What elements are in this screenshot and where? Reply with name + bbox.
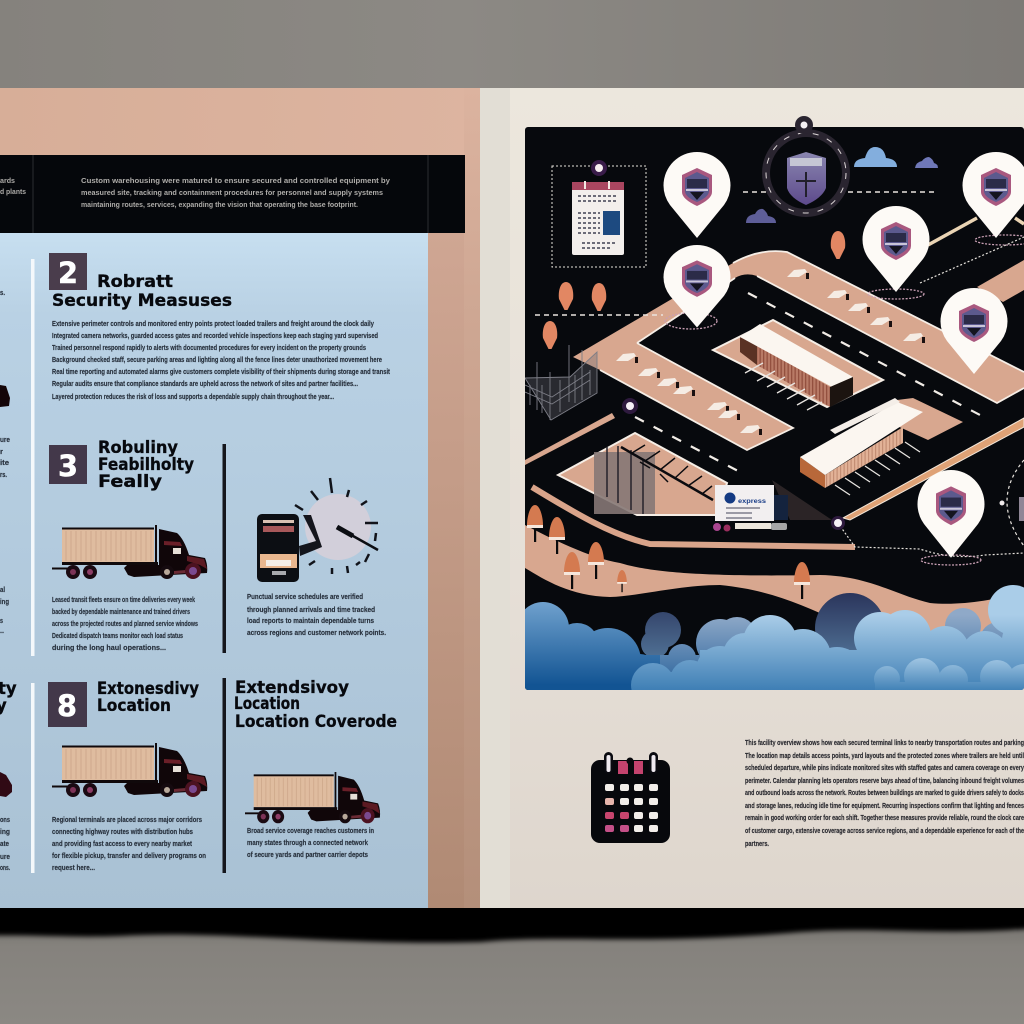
mid gray blue clouds	[660, 608, 1004, 672]
location pin 2	[664, 245, 730, 328]
heading: reliability: Robuliny	[98, 438, 178, 457]
icon: calendar	[591, 752, 670, 843]
panel: left page	[0, 88, 480, 908]
body text: truck and clock: through planned arrivals and time tracked	[247, 605, 375, 614]
blue content panel	[0, 233, 428, 908]
left edge cropped fragments: ate	[0, 839, 9, 848]
security fence	[525, 345, 597, 420]
body text: security measures: Background checked staff, secure parking areas and lighting along all the fence lines deter unauthorized movement here	[52, 355, 382, 364]
location pin 4	[962, 152, 1024, 238]
body text: security measures: Regular audits ensure that compliance standards are upheld across the network of sites and partner facilities...	[52, 379, 358, 388]
road centre dashes	[635, 293, 980, 472]
truck illustration	[52, 743, 207, 797]
delivery truck with sign: express	[738, 499, 767, 505]
heading: reliability: Feally	[98, 472, 162, 491]
heading: extensive location: Location	[97, 696, 171, 715]
body text: truck and clock: Punctual service schedules are verified	[247, 592, 363, 601]
location pin 6	[918, 470, 984, 558]
heading: security measures: Robratt	[97, 272, 173, 291]
body text: location coverage: many states through a connected network	[247, 838, 369, 847]
heading: location coverage: Location Coverode	[235, 712, 397, 731]
calendar panel	[552, 160, 646, 267]
left edge cropped fragments	[0, 288, 17, 872]
right road band	[977, 260, 1024, 302]
black intro band	[0, 155, 465, 233]
heading: security measures: Security Measuses	[52, 291, 232, 310]
page sheet	[510, 88, 1024, 908]
body text: security measures: Integrated camera networks, guarded access gates and recorded vehicle inspections keep each staging yard supervised	[52, 331, 378, 340]
body text: security measures: Extensive perimeter controls and monitored entry points protect loaded trailers and freight around the clock daily	[52, 319, 375, 328]
upper road band	[573, 251, 1024, 450]
diagonal roadside strip	[843, 418, 1024, 520]
body text: reliability: Leased transit fleets ensure on time deliveries every week	[52, 595, 196, 604]
building 2	[800, 398, 963, 488]
location pin 3	[862, 206, 930, 292]
body text: location coverage: Broad service coverage reaches customers in	[247, 826, 374, 835]
route nodes	[622, 398, 845, 530]
body text: security measures	[52, 319, 390, 401]
body text: reliability	[52, 595, 198, 652]
body text: extensive location: connecting highway routes with distribution hubs	[52, 827, 193, 836]
body text: reliability: Dedicated dispatch teams monitor each load status	[52, 631, 183, 640]
heading: extensive location: Extonesdivy	[97, 679, 199, 698]
body text: truck and clock: load reports to maintain dependable turns	[247, 616, 374, 625]
section 4: location coverage	[234, 678, 397, 859]
badge hanging loop above map	[795, 116, 813, 134]
book gutter	[480, 88, 510, 908]
section dividers	[31, 259, 226, 873]
left edge cropped fragments: r	[0, 447, 3, 456]
body text: security measures: Real time reporting and automated alarms give customers complete visibility of their shipments during storage and transit	[52, 367, 390, 376]
dotted route lines	[838, 237, 1024, 557]
location pin 5	[940, 288, 1008, 374]
left edge cropped fragments: al	[0, 585, 5, 594]
body text: truck and clock: across regions and customer network points.	[247, 628, 386, 637]
map base	[525, 127, 1024, 690]
fenced lot	[558, 433, 727, 515]
left edge cropped fragments: s	[0, 616, 3, 625]
body text: security measures: Layered protection reduces the risk of loss and supports a dependable supply chain throughout the year...	[52, 392, 334, 401]
number badge 8	[48, 682, 87, 727]
truck illustration	[52, 525, 207, 579]
number badge 2	[49, 253, 87, 290]
black intro band: Custom warehousing were matured to ensure secured and controlled equipment by	[81, 176, 391, 185]
number badge 3: 3	[58, 449, 78, 483]
left edge cropped fragments: ons	[0, 815, 10, 824]
small clouds	[746, 147, 938, 223]
section 8: extensive location	[48, 679, 207, 872]
front right cloud	[874, 658, 1024, 700]
heading: security measures	[52, 272, 232, 310]
tan connector to pin	[928, 218, 1024, 245]
body text: extensive location: for flexible pickup, transfer and delivery programs on	[52, 851, 206, 860]
body text: reliability: backed by dependable maintenance and trained drivers	[52, 607, 190, 616]
black intro band: ards	[0, 176, 15, 185]
number badge 8: 8	[57, 689, 77, 723]
central shield badge	[762, 129, 850, 217]
heading: location coverage: Extendsivoy	[235, 678, 349, 697]
left edge cropped fragments: ons.	[0, 863, 10, 872]
left edge cropped fragments: rs.	[0, 470, 7, 479]
truck illustration	[245, 772, 380, 823]
body text: reliability: across the projected routes and planned service windows	[52, 619, 198, 628]
body text: extensive location: Regional terminals are placed across major corridors	[52, 815, 202, 824]
left edge cropped fragments: ure	[0, 435, 10, 444]
body text: security measures: Trained personnel respond rapidly to alerts with documented procedures for every incident on the property grounds	[52, 343, 366, 352]
icon: truck front with clock gauge	[257, 478, 378, 582]
concrete floor background	[0, 905, 1024, 1024]
body text: extensive location: and providing fast access to every nearby market	[52, 839, 192, 848]
dashed route lines	[535, 192, 938, 315]
black intro band: d plants	[0, 187, 26, 196]
body text: extensive location: request here...	[52, 863, 95, 872]
front centre cloud	[631, 615, 865, 707]
short left strip	[525, 413, 615, 465]
left edge cropped fragments: ..	[0, 626, 4, 635]
number badge 2: 2	[58, 256, 78, 290]
left edge cropped fragments: ing	[0, 597, 9, 606]
heading: reliability: Feabilholty	[98, 455, 194, 474]
panel: right page	[480, 88, 1024, 908]
location pin 1	[664, 152, 730, 238]
body text: location coverage: of secure yards and partner carrier depots	[247, 850, 368, 859]
right dotted ring and gray panel	[1000, 460, 1024, 546]
left edge cropped fragments: s.	[0, 288, 5, 297]
location pin shadows	[665, 235, 1024, 565]
left cloud	[525, 602, 660, 690]
vehicles on strips	[616, 269, 925, 435]
body text: right page: partners.	[745, 839, 769, 848]
left edge cropped fragments: ing	[0, 827, 10, 836]
cloud bank	[525, 585, 1024, 690]
trees	[527, 231, 845, 599]
thin curved strip	[532, 487, 855, 547]
body text: location coverage	[247, 826, 374, 859]
body text: truck and clock	[247, 592, 386, 637]
left edge cropped fragments: ure	[0, 852, 10, 861]
heading: location coverage	[234, 678, 397, 731]
heading: reliability	[98, 438, 194, 491]
right cloud	[854, 585, 1024, 690]
building 1	[713, 320, 883, 407]
map illustration	[507, 127, 1024, 707]
concrete wall background	[0, 0, 1024, 90]
heading: extensive location	[97, 679, 199, 715]
parking stripes 1	[745, 363, 822, 410]
lower land strip	[525, 525, 992, 632]
delivery truck with sign	[713, 480, 832, 532]
section 2: security measures	[49, 253, 390, 401]
black intro band: measured site, tracking and containment procedures for personnel and supply systems	[81, 188, 383, 197]
left edge cropped fragments: ite	[0, 458, 9, 467]
body text: extensive location	[52, 815, 206, 872]
book drop shadow	[0, 900, 1024, 943]
number badge 3	[49, 445, 87, 484]
section 3: reliability	[49, 438, 386, 652]
back navy clouds	[641, 593, 882, 655]
tan outer strip	[464, 88, 480, 908]
black intro band: maintaining routes, services, expanding the vision that operating the base footprint.	[81, 200, 358, 209]
body text: reliability: during the long haul operations...	[52, 643, 166, 652]
body text: right page	[745, 738, 1024, 848]
parking stripes 2	[835, 442, 920, 495]
heading: location coverage: Location	[234, 694, 300, 713]
tan side strip	[428, 233, 464, 908]
road edge highlights	[600, 251, 1024, 450]
